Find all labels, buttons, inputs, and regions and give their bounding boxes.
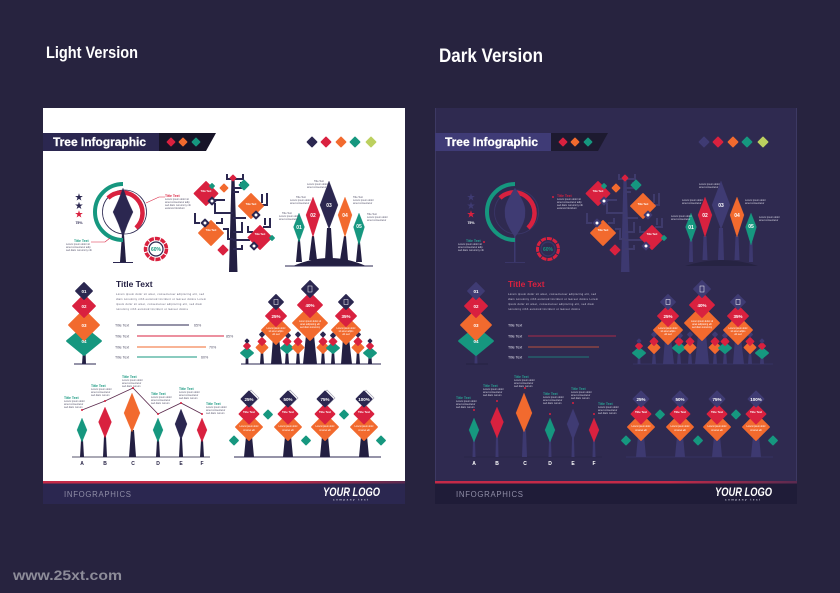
text block: title and paragraph: Title Text: [508, 279, 545, 289]
chart: line over leaf trees A to F: Title Text: [179, 387, 194, 391]
text block: title and paragraph: Lorem ipsum dolor sit amet, consectetuer adipiscing elit, sed: [116, 293, 205, 296]
chart: five leaf trees: 01: [296, 225, 302, 231]
chart: line over leaf trees A to F: Lorem ipsum dolor: [64, 400, 85, 403]
chart: line over leaf trees A to F: sed diam nonum: [206, 412, 224, 415]
chart: line over leaf trees A to F: C: [131, 461, 135, 467]
header banner: Tree Infographic: [53, 137, 147, 149]
colour palette diamonds: [308, 138, 376, 146]
chart: forest of diamond trees: sit amet adipis: [339, 330, 354, 333]
chart: five leaf trees: 04: [342, 213, 348, 219]
label right: [552, 194, 583, 210]
chart: line over leaf trees A to F: sed diam nonum: [64, 406, 82, 409]
chart: five leaf trees: Lorem ipsum dolor: [759, 216, 780, 219]
chart: line over leaf trees A to F: Title Text: [206, 402, 221, 406]
chart: forest of diamond trees: amet adipiscing elit: [692, 323, 712, 326]
chart: line over leaf trees A to F: Title Text: [64, 396, 79, 400]
chart: forest of diamond trees: 40%: [697, 303, 707, 308]
chart: percentage trees: sit amet elit: [750, 429, 762, 432]
chart: forest of diamond trees: 40%: [305, 303, 315, 308]
chart: percentage trees: sit amet elit: [282, 429, 294, 432]
chart: progress bars: [508, 324, 616, 360]
chart: dots over leaf trees A to F: Title Text: [514, 375, 529, 379]
chart: five leaf trees: amet consectetur: [353, 202, 372, 205]
chart: percentage trees: Title Text: [282, 410, 294, 414]
chart: line over leaf trees A to F: amet consectetur: [64, 403, 83, 406]
stars rating: ★: [467, 192, 476, 204]
chart: line over leaf trees A to F: sed diam nonum: [151, 402, 169, 405]
chart: line over leaf trees A to F: amet consectetur: [179, 394, 198, 397]
chart: dots over leaf trees A to F: Title Text: [571, 387, 586, 391]
chart: line over leaf trees A to F: Lorem ipsum dolor: [91, 388, 112, 391]
chart: line over leaf trees A to F: amet consectetur: [91, 391, 110, 394]
chart: stacked diamond tree: 04: [473, 339, 479, 344]
chart: five leaf trees: amet consectetur: [745, 202, 764, 205]
chart: percentage trees: 25%: [636, 397, 646, 402]
chart: percentage trees: sit amet elit: [243, 429, 255, 432]
chart: five leaf trees: Title Text: [353, 196, 363, 199]
header banner: [43, 133, 216, 151]
chart: five leaf trees: amet consectetur: [759, 219, 778, 222]
chart: line over leaf trees A to F: Title Text: [122, 375, 137, 379]
chart: forest of diamond trees: sit amet adipis: [269, 330, 284, 333]
chart: forest of diamond trees: elit sed: [664, 333, 672, 336]
chart: five leaf trees: Lorem ipsum dolor: [367, 216, 388, 219]
chart: percentage trees: Title Text: [319, 410, 331, 414]
chart: dots over leaf trees A to F: Lorem ipsum dolor: [543, 396, 564, 399]
chart: dots over leaf trees A to F: amet consectetur: [483, 391, 502, 394]
stars rating: [467, 192, 476, 225]
chart: line over leaf trees A to F: Lorem ipsum dolor: [151, 396, 172, 399]
chart: percentage trees: Title Text: [711, 410, 723, 414]
chart: branching tree: [194, 174, 274, 272]
stars rating: ★: [467, 201, 476, 212]
stars rating: ★: [75, 210, 84, 220]
chart: dots over leaf trees A to F: sed diam nonum: [456, 406, 474, 409]
chart: forest of diamond trees: Lorem ipsum dolor sit: [299, 320, 321, 323]
panel: light version: [43, 108, 405, 504]
chart: progress bars: Title Text: [115, 356, 129, 360]
chart: dots over leaf trees A to F: C: [523, 461, 527, 467]
footer: INFOGRAPHICS: [456, 490, 523, 499]
chart: forest of diamond trees: 35%: [733, 314, 743, 319]
chart: percentage trees: Lorem ipsum dolor: [670, 425, 690, 428]
chart: dots over leaf trees A to F: D: [548, 461, 552, 467]
chart: progress bars: Title Text: [508, 334, 522, 338]
label left: [66, 239, 92, 252]
chart: progress bars: 85%: [226, 334, 234, 338]
chart: percentage trees: Title Text: [635, 410, 647, 414]
stars rating: [75, 192, 84, 225]
text block: title and paragraph: Title Text: [116, 279, 153, 289]
text block: title and paragraph: [116, 279, 206, 311]
chart: percentage trees: 100%: [750, 397, 762, 402]
chart: five leaf trees: amet consectetur: [307, 186, 326, 189]
chart: branching tree: [586, 174, 666, 272]
chart: five leaf trees: 02: [702, 213, 708, 219]
chart: line over leaf trees A to F: Title Text: [91, 384, 106, 388]
footer: YOUR LOGO: [715, 485, 773, 499]
chart: progress bars: [115, 324, 234, 360]
chart: five leaf trees: Lorem ipsum dolor: [699, 183, 720, 186]
label right: [165, 194, 191, 210]
chart: forest of diamond trees: sit amet adipis: [661, 330, 676, 333]
small donut 60 percent: 60%: [543, 247, 554, 253]
chart: line over leaf trees A to F: D: [156, 461, 160, 467]
text block: title and paragraph: ipsum dolor sit amet, consectetuer adipiscing elit, sed diam: [508, 303, 594, 306]
chart: dots over leaf trees A to F: amet consectetur: [543, 399, 562, 402]
chart: percentage trees: 75%: [712, 397, 722, 402]
chart: stacked diamond tree: 03: [81, 323, 87, 328]
text block: title and paragraph: ipsum dolor sit amet, consectetuer adipiscing elit, sed diam: [116, 303, 202, 306]
chart: five leaf trees: Lorem ipsum dolor: [671, 215, 692, 218]
chart: dots over leaf trees A to F: sed diam nonum: [571, 397, 589, 400]
chart: dots over leaf trees A to F: sed diam nonum: [514, 385, 532, 388]
chart: forest of diamond trees: elit sed: [342, 333, 350, 336]
chart: progress bars: 60%: [201, 356, 209, 360]
label right: amet consectetur adip: [165, 201, 190, 204]
chart: line over leaf trees A to F: F: [200, 461, 204, 467]
label right: Lorem ipsum dolor sit: [557, 198, 581, 201]
chart: branching tree: Title Text: [593, 190, 604, 193]
chart: five leaf trees: amet consectetur: [279, 218, 298, 221]
chart: dots over leaf trees A to F: Title Text: [456, 396, 471, 400]
chart: line over leaf trees A to F: [64, 375, 227, 467]
text block: title and paragraph: [508, 279, 598, 311]
footer: YOUR LOGO: [323, 485, 381, 499]
chart: percentage trees: [622, 392, 777, 457]
chart: stacked diamond tree: [67, 283, 101, 364]
label left: Title Text: [74, 239, 89, 243]
chart: branching tree: Title Text: [206, 229, 217, 232]
chart: five leaf trees: Title Text: [314, 180, 324, 183]
label left: sed diam nonummy nib: [66, 249, 92, 252]
chart: forest of diamond trees: 35%: [341, 314, 351, 319]
chart: stacked diamond tree: 02: [473, 304, 479, 309]
chart: five leaf trees: 04: [734, 213, 740, 219]
chart: forest of diamond trees: Lorem ipsum dolor: [658, 327, 678, 330]
chart: forest of diamond trees: Lorem ipsum dolor: [728, 327, 748, 330]
label right: sed diam nonummy nib: [557, 204, 583, 207]
chart: percentage trees: 50%: [675, 397, 685, 402]
chart: dots over leaf trees A to F: E: [571, 461, 575, 467]
chart: five leaf trees: Lorem ipsum dolor: [745, 199, 766, 202]
header banner: Tree Infographic: [445, 137, 539, 149]
chart: ring tree: [458, 184, 583, 262]
chart: stacked diamond tree: 02: [81, 304, 87, 309]
chart: forest of diamond trees: Lorem ipsum dolor: [336, 327, 356, 330]
chart: line over leaf trees A to F: Lorem ipsum dolor: [122, 379, 143, 382]
chart: forest of diamond trees: elit sed: [272, 333, 280, 336]
chart: stacked diamond tree: 01: [81, 289, 87, 294]
chart: five leaf trees: 05: [356, 224, 362, 230]
label right: euismod tincidunt: [557, 207, 577, 210]
chart: percentage trees: Title Text: [358, 410, 370, 414]
chart: percentage trees: Lorem ipsum dolor: [278, 425, 298, 428]
colour palette diamonds: [700, 138, 768, 146]
chart: line over leaf trees A to F: amet consectetur: [206, 409, 225, 412]
chart: forest of diamond trees: amet adipiscing elit: [300, 323, 320, 326]
chart: five leaf trees: 01: [688, 225, 694, 231]
chart: dots over leaf trees A to F: sed diam nonum: [598, 412, 616, 415]
chart: percentage trees: Lorem ipsum dolor: [315, 425, 335, 428]
chart: five leaf trees: 02: [310, 213, 316, 219]
stars rating: ★: [75, 201, 84, 212]
stars rating: 75%: [467, 221, 475, 225]
panel: dark version: [435, 108, 797, 504]
chart: stacked diamond tree: 03: [473, 323, 479, 328]
chart: dots over leaf trees A to F: Lorem ipsum dolor: [514, 379, 535, 382]
chart: percentage trees: [230, 390, 385, 457]
stars rating: ★: [467, 210, 476, 220]
chart: dots over leaf trees A to F: Lorem ipsum dolor: [456, 400, 477, 403]
chart: forest of diamond trees: Lorem ipsum dolor sit: [691, 320, 713, 323]
chart: five leaf trees: [279, 180, 388, 266]
chart: line over leaf trees A to F: E: [179, 461, 183, 467]
dark panel contents: [435, 133, 797, 504]
chart: line over leaf trees A to F: sed diam nonum: [91, 394, 109, 397]
chart: branching tree: Title Text: [201, 190, 212, 193]
chart: stacked diamond tree: [459, 283, 493, 364]
chart: five leaf trees: Lorem ipsum dolor: [353, 199, 374, 202]
label right: Lorem ipsum dolor sit: [165, 198, 189, 201]
text block: title and paragraph: Lorem ipsum dolor sit amet, consectetuer adipiscing elit, sed: [508, 293, 597, 296]
chart: forest of diamond trees: sed diam nonummy: [300, 327, 321, 329]
footer: [43, 481, 405, 504]
chart: dots over leaf trees A to F: Title Text: [543, 392, 558, 396]
chart: progress bars: Title Text: [115, 346, 129, 350]
chart: line over leaf trees A to F: Lorem ipsum dolor: [206, 406, 227, 409]
footer: company text: [333, 498, 368, 502]
chart: line over leaf trees A to F: A: [80, 461, 84, 467]
chart: forest of diamond trees: elit sed: [734, 333, 742, 336]
chart: percentage trees: 25%: [244, 397, 254, 402]
chart: percentage trees: Lorem ipsum dolor: [631, 425, 651, 428]
chart: forest of diamond trees: 25%: [663, 314, 673, 319]
footer: company text: [725, 498, 760, 502]
chart: dots over leaf trees A to F: Lorem ipsum dolor: [571, 391, 592, 394]
header banner: [435, 133, 608, 151]
chart: forest of diamond trees: sed diam nonummy: [692, 327, 713, 329]
chart: five leaf trees: 03: [718, 203, 724, 209]
chart: five leaf trees: [671, 181, 780, 266]
chart: dots over leaf trees A to F: sed diam nonum: [543, 402, 561, 405]
label left: sed diam nonummy nib: [458, 249, 484, 252]
chart: line over leaf trees A to F: sed diam nonum: [179, 397, 197, 400]
heading: light version: Light Version: [46, 44, 138, 62]
footer: INFOGRAPHICS: [64, 490, 131, 499]
text block: title and paragraph: diam nonummy nibh euismod tincidunt ut laoreet dolore Lorem: [508, 298, 598, 301]
label left: Title Text: [466, 239, 481, 243]
chart: dots over leaf trees A to F: amet consectetur: [514, 382, 533, 385]
chart: percentage trees: Lorem ipsum dolor: [354, 425, 374, 428]
label right: amet consectetur adip: [557, 201, 582, 204]
chart: branching tree: Title Text: [638, 203, 649, 206]
chart: percentage trees: Title Text: [750, 410, 762, 414]
chart: percentage trees: sit amet elit: [711, 429, 723, 432]
chart: five leaf trees: 05: [748, 224, 754, 230]
chart: percentage trees: Title Text: [243, 410, 255, 414]
chart: percentage trees: Lorem ipsum dolor: [707, 425, 727, 428]
chart: dots over leaf trees A to F: amet consectetur: [456, 403, 475, 406]
small donut 60 percent: 60%: [151, 247, 162, 253]
label right: Title Text: [165, 194, 180, 198]
label right: Title Text: [557, 194, 572, 198]
label left: Lorem ipsum dolor sit: [458, 243, 482, 246]
chart: forest of diamond trees: Lorem ipsum dolor: [266, 327, 286, 330]
chart: branching tree: Title Text: [598, 229, 609, 232]
chart: progress bars: Title Text: [115, 324, 129, 328]
chart: five leaf trees: Lorem ipsum dolor: [279, 215, 300, 218]
chart: dots over leaf trees A to F: F: [592, 461, 596, 467]
chart: five leaf trees: amet consectetur: [699, 186, 718, 189]
chart: line over leaf trees A to F: Lorem ipsum dolor: [179, 391, 200, 394]
chart: dots over leaf trees A to F: Title Text: [483, 384, 498, 388]
chart: percentage trees: sit amet elit: [635, 429, 647, 432]
chart: dots over leaf trees A to F: A: [472, 461, 476, 467]
chart: five leaf trees: amet consectetur: [682, 202, 701, 205]
chart: line over leaf trees A to F: B: [103, 461, 107, 467]
chart: dots over leaf trees A to F: Lorem ipsum dolor: [483, 388, 504, 391]
chart: percentage trees: sit amet elit: [674, 429, 686, 432]
chart: line over leaf trees A to F: sed diam nonum: [122, 385, 140, 388]
chart: dots over leaf trees A to F: Title Text: [598, 402, 613, 406]
label right: euismod tincidunt: [165, 207, 185, 210]
chart: five leaf trees: amet consectetur: [671, 218, 690, 221]
chart: five leaf trees: amet consectetur: [367, 219, 386, 222]
chart: line over leaf trees A to F: amet consectetur: [151, 399, 170, 402]
chart: branching tree: Title Text: [255, 233, 266, 236]
chart: five leaf trees: Title Text: [282, 212, 292, 215]
heading: dark version: Dark Version: [439, 46, 543, 67]
chart: five leaf trees: amet consectetur: [290, 202, 309, 205]
chart: dots over leaf trees A to F: [456, 375, 619, 467]
chart: branching tree: Title Text: [647, 233, 658, 236]
chart: dots over leaf trees A to F: B: [495, 461, 499, 467]
watermark: www.25xt.com: [12, 567, 122, 583]
stars rating: ★: [75, 192, 84, 204]
chart: progress bars: Title Text: [508, 324, 522, 328]
chart: line over leaf trees A to F: amet consectetur: [122, 382, 141, 385]
chart: stacked diamond tree: 04: [81, 339, 87, 344]
chart: progress bars: Title Text: [508, 346, 522, 350]
chart: dots over leaf trees A to F: amet consectetur: [598, 409, 617, 412]
chart: percentage trees: Lorem ipsum dolor: [239, 425, 259, 428]
stars rating: 75%: [75, 221, 83, 225]
chart: five leaf trees: Title Text: [367, 213, 377, 216]
chart: dots over leaf trees A to F: amet consectetur: [571, 394, 590, 397]
chart: dots over leaf trees A to F: Lorem ipsum dolor: [598, 406, 619, 409]
text block: title and paragraph: nonummy nibh euismod tincidunt ut laoreet dolore: [508, 308, 581, 311]
text block: title and paragraph: nonummy nibh euismod tincidunt ut laoreet dolore: [116, 308, 189, 311]
label left: Lorem ipsum dolor sit: [66, 243, 90, 246]
text block: title and paragraph: diam nonummy nibh euismod tincidunt ut laoreet dolore Lorem: [116, 298, 206, 301]
label left: amet consectetur adip: [458, 246, 483, 249]
chart: stacked diamond tree: 01: [473, 289, 479, 294]
label left: [458, 239, 485, 252]
chart: dots over leaf trees A to F: sed diam nonum: [483, 394, 501, 397]
label left: amet consectetur adip: [66, 246, 91, 249]
chart: percentage trees: 50%: [283, 397, 293, 402]
chart: line over leaf trees A to F: Title Text: [151, 392, 166, 396]
chart: ring tree: [66, 184, 191, 262]
chart: forest of diamond trees: [241, 281, 381, 364]
chart: five leaf trees: Lorem ipsum dolor: [290, 199, 311, 202]
chart: five leaf trees: 03: [326, 203, 332, 209]
chart: forest of diamond trees: 25%: [271, 314, 281, 319]
chart: progress bars: Title Text: [508, 356, 522, 360]
chart: percentage trees: Title Text: [674, 410, 686, 414]
chart: five leaf trees: Title Text: [296, 196, 306, 199]
chart: percentage trees: 100%: [358, 397, 370, 402]
chart: five leaf trees: Lorem ipsum dolor: [682, 199, 703, 202]
chart: branching tree: Title Text: [246, 203, 257, 206]
chart: progress bars: 65%: [194, 324, 202, 328]
chart: forest of diamond trees: sit amet adipis: [731, 330, 746, 333]
chart: percentage trees: Lorem ipsum dolor: [746, 425, 766, 428]
chart: progress bars: 70%: [209, 346, 217, 350]
chart: percentage trees: sit amet elit: [319, 429, 331, 432]
chart: percentage trees: sit amet elit: [358, 429, 370, 432]
chart: progress bars: Title Text: [115, 334, 129, 338]
chart: forest of diamond trees: [633, 281, 773, 364]
chart: five leaf trees: Lorem ipsum dolor: [307, 183, 328, 186]
chart: percentage trees: 75%: [320, 397, 330, 402]
footer: [435, 481, 797, 504]
label right: sed diam nonummy nib: [165, 204, 191, 207]
